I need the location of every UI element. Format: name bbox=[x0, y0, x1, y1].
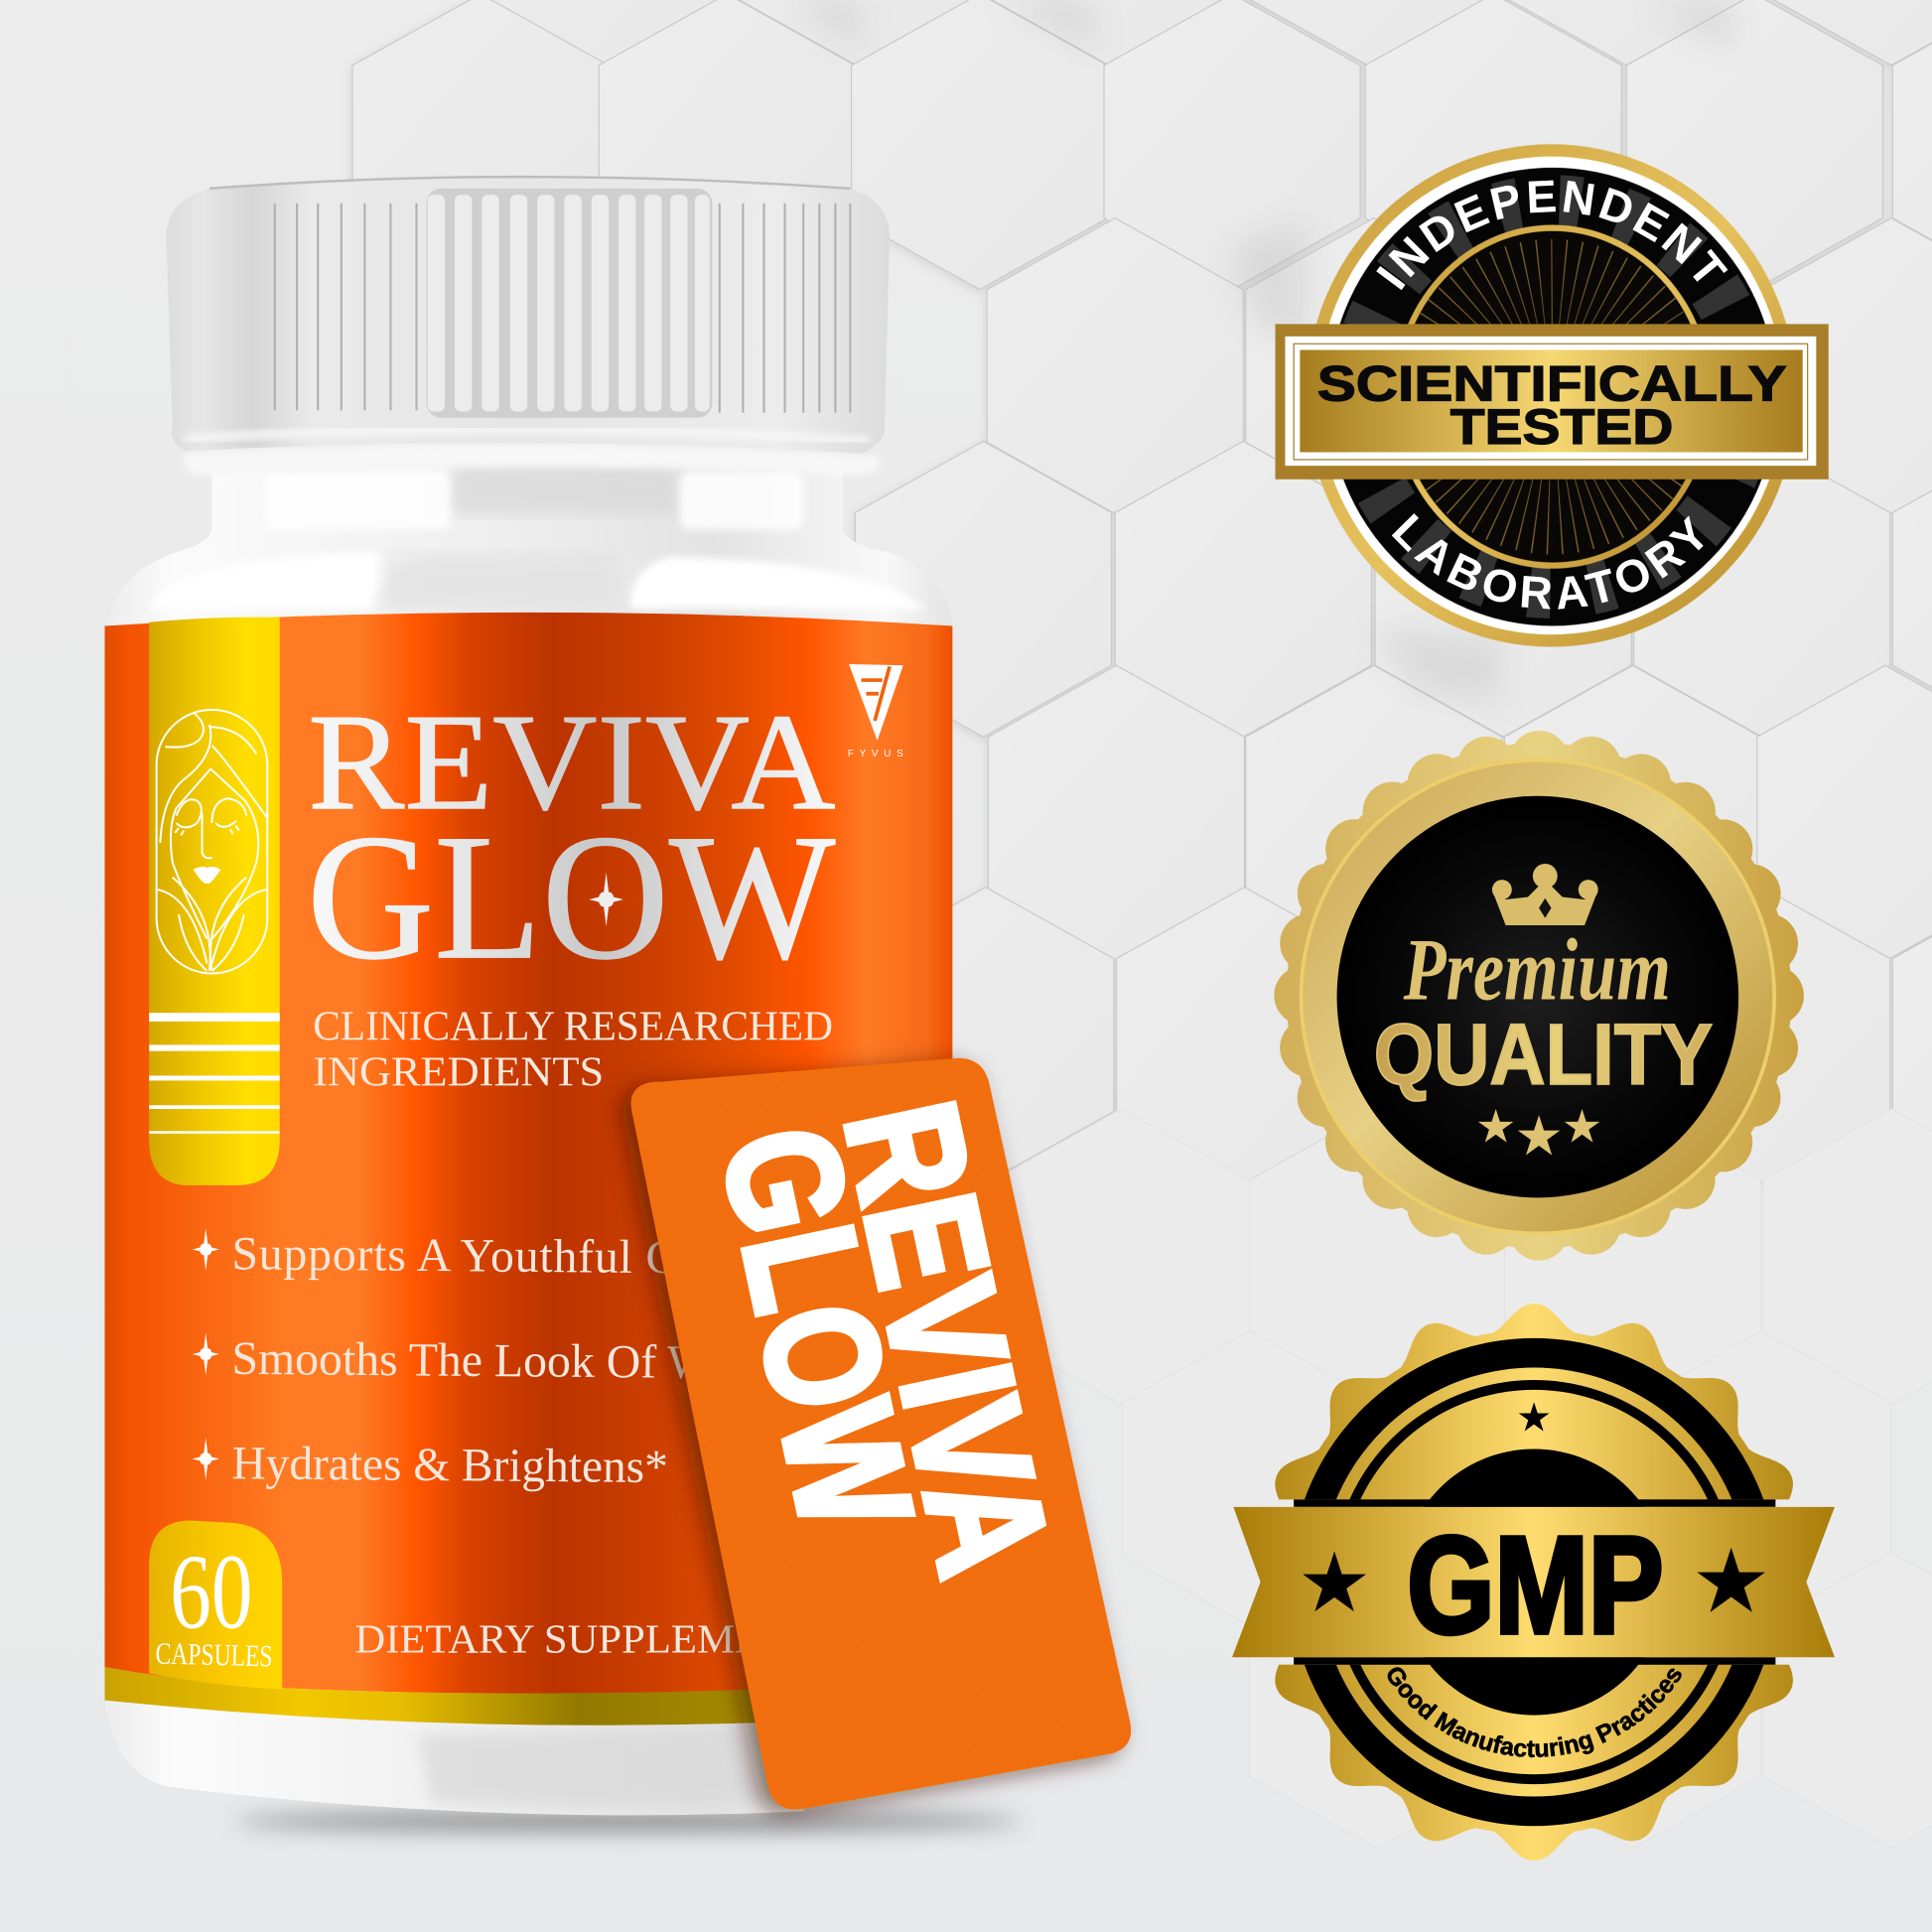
arc text: Good Manufacturing Practices bbox=[1388, 1667, 1682, 1757]
yellow side panel bbox=[149, 618, 280, 1185]
badge bottom text: LABORATORY bbox=[1392, 513, 1704, 610]
cap grip ribs bbox=[275, 204, 850, 413]
icon: FYVUS logo bbox=[848, 664, 908, 759]
scalloped edge bbox=[1287, 743, 1792, 1248]
capsule count tab: CAPSULES bbox=[155, 1635, 273, 1674]
claim line bbox=[313, 1003, 833, 1095]
claim line: CLINICALLY RESEARCHED bbox=[313, 1003, 833, 1049]
ring segments bbox=[1358, 203, 1747, 592]
black disc bbox=[1337, 796, 1738, 1197]
card name: GLOW bbox=[687, 1112, 946, 1545]
benefit list bbox=[193, 1227, 840, 1493]
icon: woman face line art bbox=[157, 710, 267, 973]
badge top text: INDEPENDENT bbox=[1376, 181, 1727, 290]
badge rings bbox=[1307, 144, 1796, 647]
capsule count tab bbox=[149, 1520, 282, 1690]
benefit list: Supports A Youthful Glow bbox=[231, 1227, 755, 1285]
gold ring bbox=[1302, 760, 1774, 1233]
neck ring bbox=[184, 444, 880, 476]
product name bbox=[307, 686, 835, 997]
starburst edge bbox=[1275, 1304, 1793, 1861]
icon: FYVUS logo: FYVUS bbox=[848, 749, 908, 759]
name line 1: REVIVA bbox=[308, 686, 835, 839]
benefit list: Smooths The Look Of Wrinkles bbox=[231, 1332, 840, 1390]
orange card bbox=[631, 1058, 1131, 1810]
label orange wrap bbox=[104, 613, 952, 1694]
icon: sparkle in O bbox=[589, 873, 623, 926]
hexagon wall pattern bbox=[352, 0, 1932, 1182]
icon: crown bbox=[1492, 864, 1598, 925]
badge: scientifically tested bbox=[1275, 143, 1829, 647]
label gold band bbox=[104, 1667, 763, 1725]
cap central grip panel bbox=[426, 189, 712, 418]
banner bbox=[1232, 1499, 1835, 1665]
name line 2: GLOW bbox=[307, 798, 835, 997]
hexagon wall depth shading bbox=[788, 0, 1737, 702]
card name: REVIVA bbox=[810, 1088, 1084, 1590]
card name bbox=[687, 1088, 1084, 1590]
supplement line: DIETARY SUPPLEMENT bbox=[354, 1616, 817, 1661]
claim line: INGREDIENTS bbox=[313, 1048, 604, 1095]
neck and shoulder highlights bbox=[150, 464, 926, 1808]
badge: premium quality bbox=[1287, 743, 1792, 1248]
capsule count tab: 60 bbox=[170, 1533, 252, 1651]
bottle body bbox=[104, 462, 952, 1815]
premium script: Premium bbox=[1403, 921, 1671, 1020]
three stars bbox=[1478, 1109, 1599, 1156]
bottle bbox=[104, 176, 1023, 1831]
GMP rings bbox=[1305, 1338, 1763, 1826]
banner: GMP bbox=[1407, 1508, 1663, 1662]
cap bbox=[167, 176, 890, 454]
ribbon bbox=[1276, 324, 1829, 480]
benefit list: Hydrates & Brightens* bbox=[231, 1437, 668, 1493]
hexagon wall, faded lower rows bbox=[993, 1109, 1932, 1849]
inner ring and sunburst bbox=[1396, 228, 1709, 566]
ribbon: SCIENTIFICALLY bbox=[1317, 355, 1787, 411]
bottle shadow bbox=[234, 1811, 1023, 1831]
ribbon: TESTED bbox=[1450, 399, 1673, 455]
badge: GMP bbox=[1232, 1254, 1835, 1861]
panel stripes bbox=[149, 1013, 280, 1134]
top star bbox=[1519, 1402, 1549, 1432]
quality word: QUALITY bbox=[1374, 1007, 1713, 1103]
